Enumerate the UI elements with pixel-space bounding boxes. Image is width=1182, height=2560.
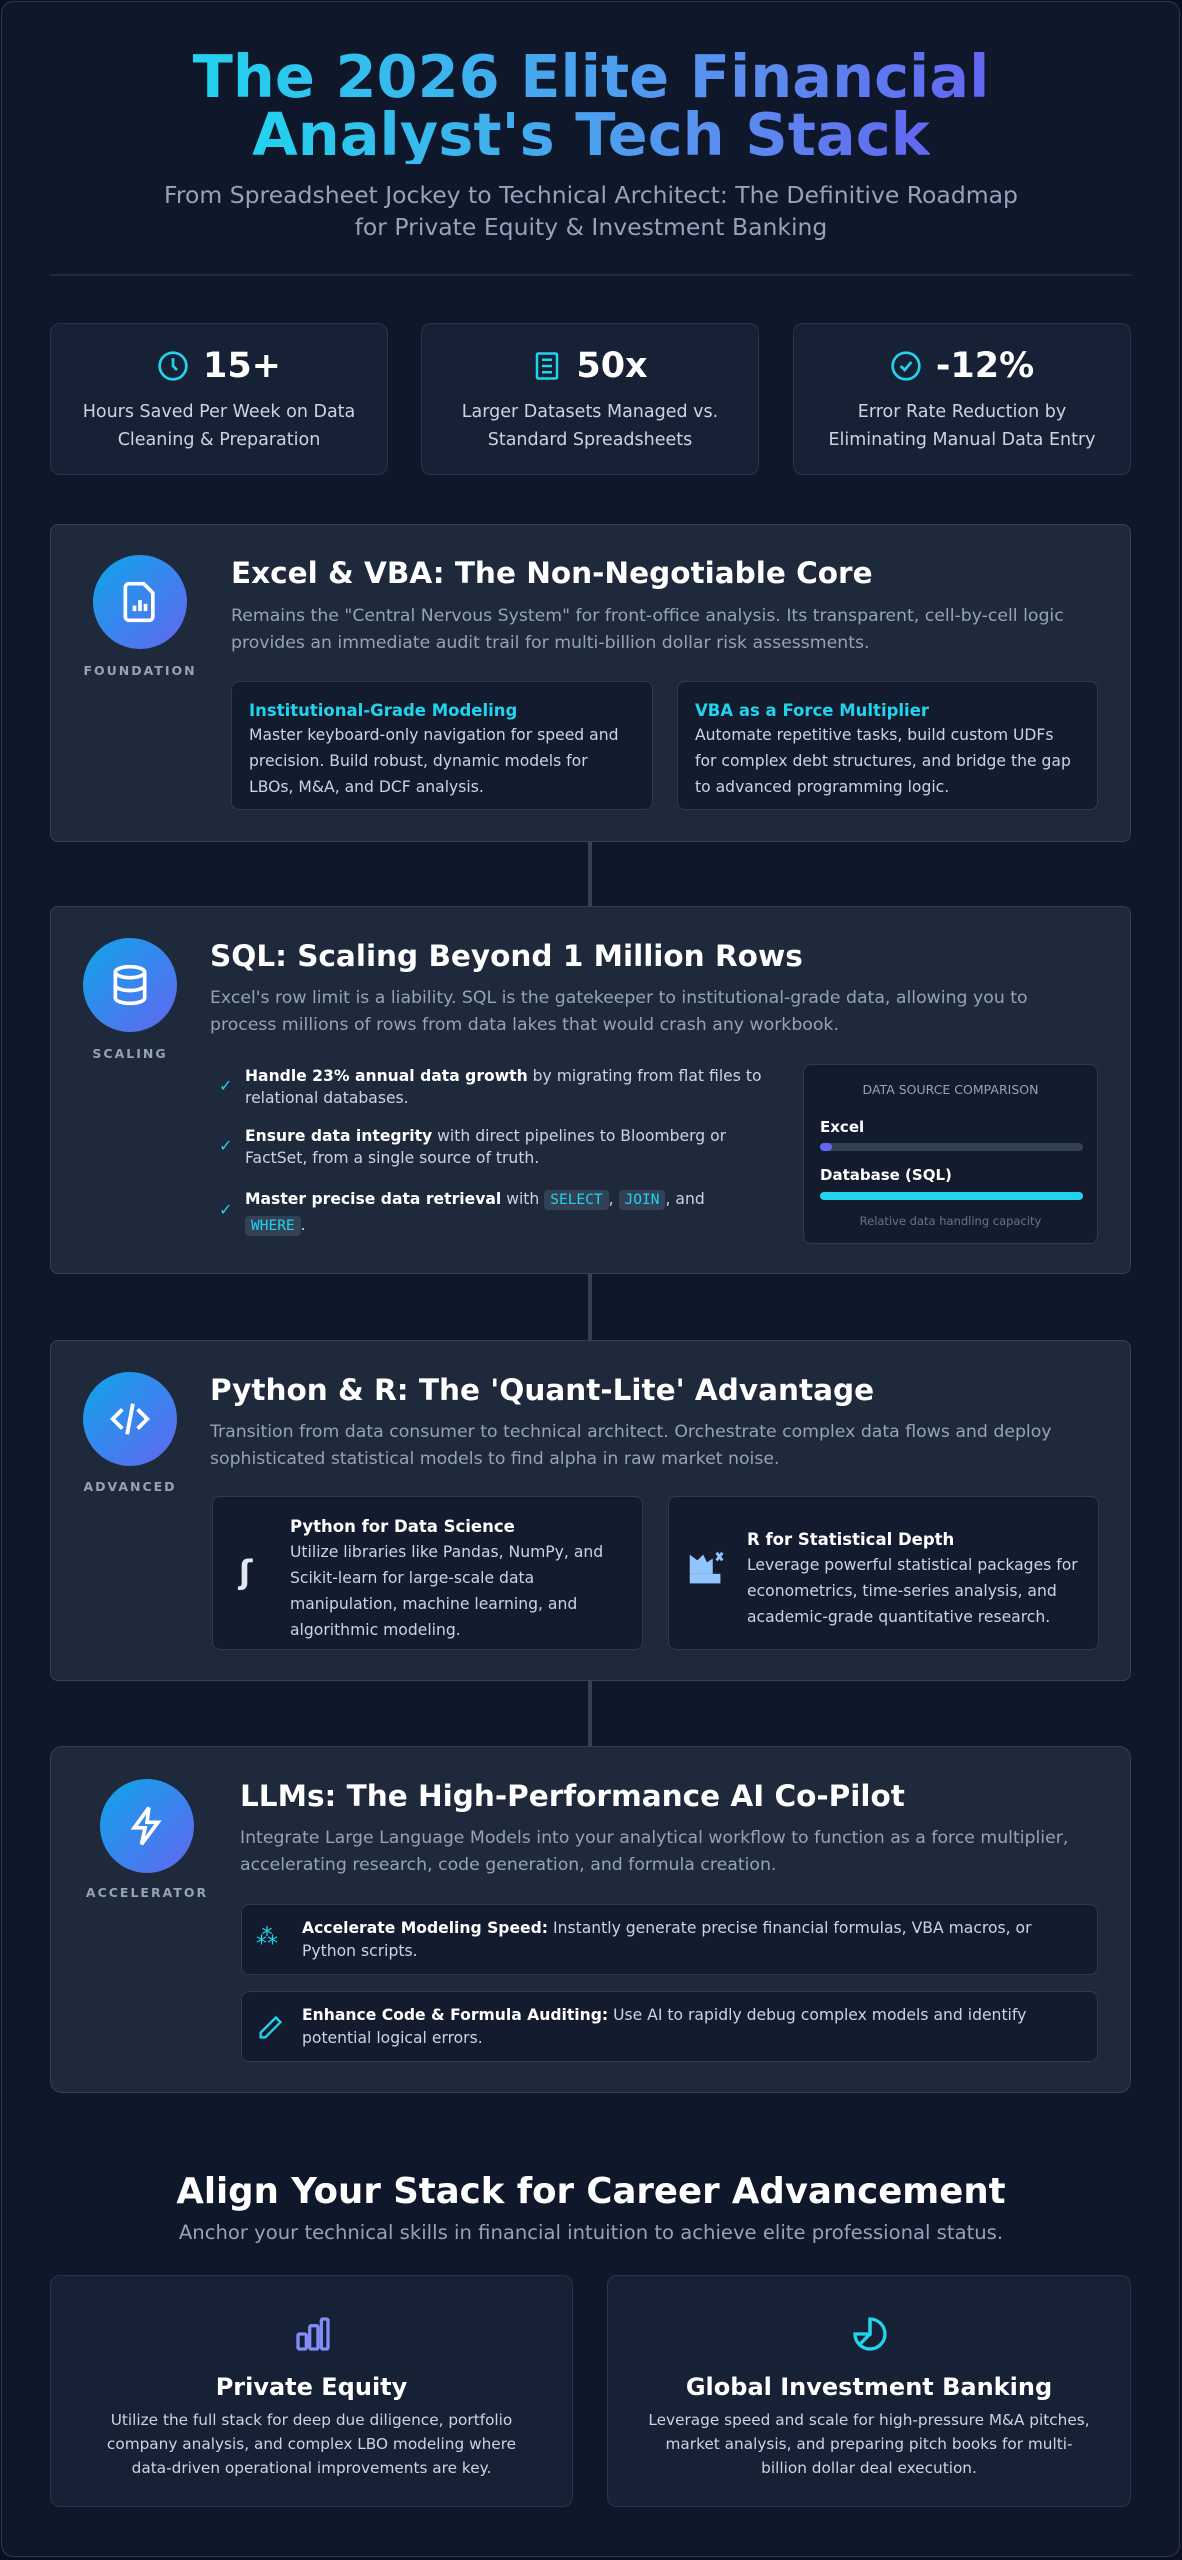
card: investment banking: market analysis, and preparing pitch books for multi- (666, 2435, 1072, 2453)
subcard: python: Scikit-learn for large-scale data (290, 1569, 534, 1587)
heading: career: Align Your Stack for Career Advancement (176, 2171, 1006, 2212)
panel: SQL (50, 906, 1131, 1274)
icon: pie chart (853, 2317, 887, 2351)
stat: datasets: Standard Spreadsheets (488, 430, 692, 450)
panel: SQL: ✓ (219, 1136, 232, 1155)
panel description: Remains the "Central Nervous System" for front-office analysis. Its transparent, cell-by-cell logic (231, 606, 1064, 626)
item: modeling speed: Accelerate Modeling Speed: Instantly generate precise financial formulas, VBA macros, or (302, 1919, 1032, 1937)
panel title: LLMs: The High-Performance AI Co-Pilot (240, 1779, 905, 1813)
subheading: Anchor your technical skills in financial intuition to achieve elite professional status. (179, 2221, 1003, 2244)
icon: pencil (260, 2016, 282, 2038)
subcard: R (668, 1496, 1099, 1650)
stat: datasets (421, 323, 759, 475)
panel title: Python & R: The 'Quant-Lite' Advantage (210, 1373, 874, 1407)
check item 3 (219, 1190, 705, 1236)
subcard: modeling: Institutional-Grade Modeling (249, 701, 517, 720)
subtitle: From Spreadsheet Jockey to Technical Architect: The Definitive Roadmap (164, 181, 1018, 209)
panel: Excel & VBA (50, 524, 1131, 842)
card: private equity: company analysis, and complex LBO modeling where (107, 2435, 516, 2453)
panel title: SQL: Scaling Beyond 1 Million Rows (210, 939, 803, 973)
label: accelerator: ACCELERATOR (86, 1885, 208, 1900)
panel description: provides an immediate audit trail for multi-billion dollar risk assessments. (231, 633, 869, 653)
item: auditing: Enhance Code & Formula Auditing: Use AI to rapidly debug complex models and identify (302, 2006, 1026, 2024)
card: investment banking: Leverage speed and scale for high-pressure M&A pitches, (648, 2411, 1090, 2429)
panel description: Transition from data consumer to technical architect. Orchestrate complex data flows and deploy (210, 1422, 1052, 1442)
card: private equity: Private Equity (216, 2373, 407, 2401)
panel description: sophisticated statistical models to find alpha in raw market noise. (210, 1449, 779, 1469)
check item 1: relational databases. (245, 1089, 409, 1107)
stat: error rate: Eliminating Manual Data Entry (828, 430, 1096, 450)
check item 3: WHERE . (251, 1216, 306, 1234)
item: auditing: potential logical errors. (302, 2029, 483, 2047)
icon: R chart (690, 1552, 724, 1584)
stat: hours saved: Cleaning & Preparation (118, 430, 320, 450)
subcard: python: algorithmic modeling. (290, 1621, 461, 1639)
card: investment banking (607, 2275, 1131, 2507)
stat: error rate: -12% (936, 346, 1034, 386)
check item 2 (219, 1127, 726, 1167)
title: Analyst's Tech Stack (252, 100, 930, 169)
subcard: VBA: to advanced programming logic. (695, 778, 949, 796)
chart: data source comparison: Relative data handling capacity (860, 1214, 1041, 1228)
check item 1: Handle 23% annual data growth by migrating from flat files to (245, 1067, 761, 1085)
subcard: modeling (231, 681, 653, 810)
stat: hours saved: 15+ (203, 346, 281, 386)
item: modeling speed: Python scripts. (302, 1942, 418, 1960)
icon: bar chart (296, 2317, 330, 2351)
stat: hours saved (50, 323, 388, 475)
chart: data source comparison: Database (SQL) (820, 1166, 952, 1184)
subcard: VBA: for complex debt structures, and bridge the gap (695, 752, 1071, 770)
subcard: python: Utilize libraries like Pandas, NumPy, and (290, 1543, 603, 1561)
title (193, 42, 989, 169)
panel: LLMs (50, 1746, 1131, 2093)
label: advanced: ADVANCED (83, 1479, 177, 1494)
stat: error rate (793, 323, 1131, 475)
chart: data source comparison: DATA SOURCE COMPARISON (863, 1082, 1038, 1097)
panel description (240, 1828, 1068, 1875)
panel description (210, 1422, 1052, 1469)
subcard: R: academic-grade quantitative research. (747, 1608, 1050, 1626)
checklist (219, 1067, 761, 1236)
panel title: Excel & VBA: The Non-Negotiable Core (231, 556, 873, 590)
chart: data source comparison (803, 1064, 1098, 1244)
check item 2: FactSet, from a single source of truth. (245, 1149, 539, 1167)
card: private equity (50, 2275, 573, 2507)
icon: python: ʃ (239, 1553, 252, 1591)
item: modeling speed (241, 1904, 1098, 1975)
subcard: R: R for Statistical Depth (747, 1530, 954, 1549)
stat: datasets: Larger Datasets Managed vs. (462, 402, 718, 422)
subcard: python: Python for Data Science (290, 1517, 515, 1536)
panel description: Excel's row limit is a liability. SQL is the gatekeeper to institutional-grade data, allowing you to (210, 988, 1028, 1008)
panel: Python & R (50, 1340, 1131, 1681)
panel: SQL: ✓ (219, 1076, 232, 1095)
icon: sparkle: ⁂ (256, 1925, 278, 1950)
panel description: Integrate Large Language Models into your analytical workflow to function as a force multiplier, (240, 1828, 1068, 1848)
icon: code (83, 1372, 177, 1466)
panel description: accelerating research, code generation, and formula creation. (240, 1855, 776, 1875)
stat: hours saved: Hours Saved Per Week on Data (83, 402, 355, 422)
stat: error rate: Error Rate Reduction by (858, 402, 1066, 422)
subcard: VBA (677, 681, 1098, 810)
panel description (231, 606, 1064, 653)
subcard: VBA: VBA as a Force Multiplier (695, 701, 929, 720)
panel description (210, 988, 1028, 1035)
icon: database (83, 938, 177, 1032)
card: investment banking: Global Investment Banking (686, 2373, 1052, 2401)
check item 3: Master precise data retrieval with SELECT , JOIN , and (245, 1190, 705, 1208)
item: auditing (241, 1991, 1098, 2062)
chart: data source comparison: Excel (820, 1118, 864, 1136)
subcard: VBA: Automate repetitive tasks, build custom UDFs (695, 726, 1054, 744)
title: The 2026 Elite Financial (193, 42, 989, 111)
card: investment banking: billion dollar deal execution. (761, 2459, 977, 2477)
subcard: python (212, 1496, 643, 1650)
subcard: R: Leverage powerful statistical packages for (747, 1556, 1078, 1574)
panel: SQL: ✓ (219, 1200, 232, 1219)
subcard: modeling: Master keyboard-only navigation for speed and (249, 726, 618, 744)
check item 1 (219, 1067, 761, 1107)
subcard: R: econometrics, time-series analysis, and (747, 1582, 1057, 1600)
card: private equity: data-driven operational improvements are key. (132, 2459, 491, 2477)
subtitle: for Private Equity & Investment Banking (355, 213, 827, 241)
icon: spreadsheet file (93, 555, 187, 649)
subcard: python: manipulation, machine learning, and (290, 1595, 577, 1613)
check item 2: Ensure data integrity with direct pipelines to Bloomberg or (245, 1127, 726, 1145)
subtitle (164, 181, 1018, 241)
card: private equity: Utilize the full stack for deep due diligence, portfolio (111, 2411, 512, 2429)
subcard: modeling: precision. Build robust, dynamic models for (249, 752, 588, 770)
label: scaling: SCALING (92, 1046, 168, 1061)
icon: lightning (100, 1779, 194, 1873)
subcard: modeling: LBOs, M&A, and DCF analysis. (249, 778, 484, 796)
panel description: process millions of rows from data lakes that would crash any workbook. (210, 1015, 839, 1035)
label: foundation: FOUNDATION (83, 663, 197, 678)
stat: datasets: 50x (576, 346, 648, 386)
